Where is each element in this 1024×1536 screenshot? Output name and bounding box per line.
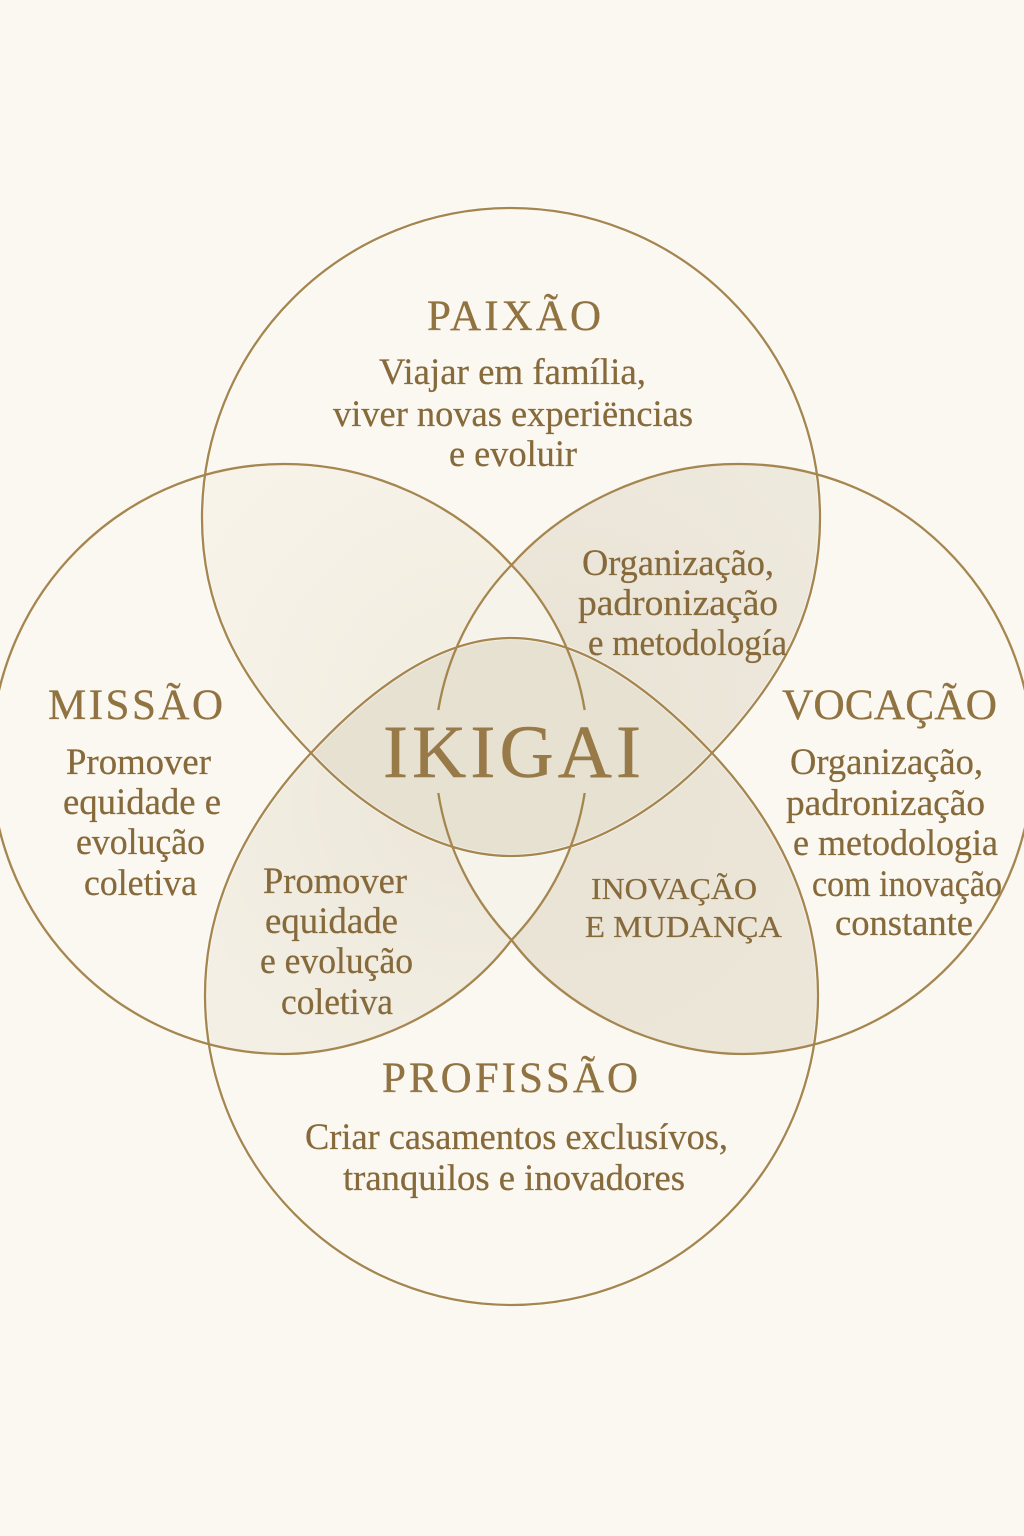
text: profissão and vocação overlap: E MUDANÇA <box>585 909 783 944</box>
panel: paixão <box>333 293 693 475</box>
text: missão description: equidade e <box>63 782 221 823</box>
outline halo <box>202 208 820 1305</box>
circle: profissão <box>205 638 818 1305</box>
text: paixão description: Viajar em família, <box>379 352 646 393</box>
panel: vocação <box>782 682 1002 944</box>
overlap: paixão and missão <box>206 466 510 750</box>
text: vocação description: padronização <box>786 783 985 824</box>
text: profissão and vocação overlap <box>585 871 783 944</box>
ikigai diagram <box>0 206 1024 1306</box>
text: missão description <box>63 742 221 904</box>
text: missão and profissão overlap: e evolução <box>260 941 413 982</box>
heading: missão: MISSÃO <box>48 682 223 729</box>
text: paixão and vocação overlap: Organização, <box>582 543 774 584</box>
circle outlines <box>0 208 1024 1305</box>
text: vocação description <box>786 742 1002 944</box>
central vertical lens <box>437 565 586 940</box>
text: missão description: Promover <box>66 742 211 783</box>
text: profissão description: tranquilos e inovadores <box>343 1158 685 1199</box>
circle: vocação <box>438 464 1024 1054</box>
heading: paixão: PAIXÃO <box>427 293 601 340</box>
text: missão description: evolução <box>76 822 205 863</box>
text: paixão and vocação overlap: padronização <box>578 583 778 624</box>
overlap: profissão and vocação <box>513 756 816 1053</box>
text: paixão and vocação overlap <box>578 543 787 664</box>
panel: missão <box>48 682 223 904</box>
text: paixão description: e evoluir <box>449 434 577 475</box>
text: profissão description: Criar casamentos exclusívos, <box>305 1117 728 1158</box>
title: ikigai: IKIGAI <box>383 711 641 794</box>
panel: profissão <box>305 1055 728 1199</box>
text: missão and profissão overlap: coletiva <box>281 982 393 1023</box>
overlap shading <box>206 465 818 1053</box>
text: missão and profissão overlap: equidade <box>265 901 398 942</box>
circle: paixão <box>202 208 820 856</box>
text: paixão description <box>333 352 693 475</box>
heading: vocação: VOCAÇÃO <box>782 682 997 729</box>
text: vocação description: e metodologia <box>793 823 998 864</box>
text: vocação description: constante <box>835 903 973 944</box>
central ikigai lens <box>314 640 586 854</box>
text: paixão description: viver novas experiëncias <box>333 394 693 435</box>
text: missão and profissão overlap: Promover <box>263 861 407 902</box>
text: missão description: coletiva <box>84 863 197 904</box>
overlap: paixão and vocação <box>513 465 818 750</box>
text: vocação description: com inovação <box>812 864 1002 905</box>
text: profissão and vocação overlap: INOVAÇÃO <box>591 871 757 906</box>
text: paixão and vocação overlap: e metodología <box>588 623 787 664</box>
circle: missão <box>0 464 585 1054</box>
text: profissão description <box>305 1117 728 1199</box>
overlap: profissão and missão <box>207 756 510 1053</box>
text: vocação description: Organização, <box>790 742 983 783</box>
text: missão and profissão overlap <box>260 861 413 1023</box>
heading: profissão: PROFISSÃO <box>382 1055 638 1102</box>
